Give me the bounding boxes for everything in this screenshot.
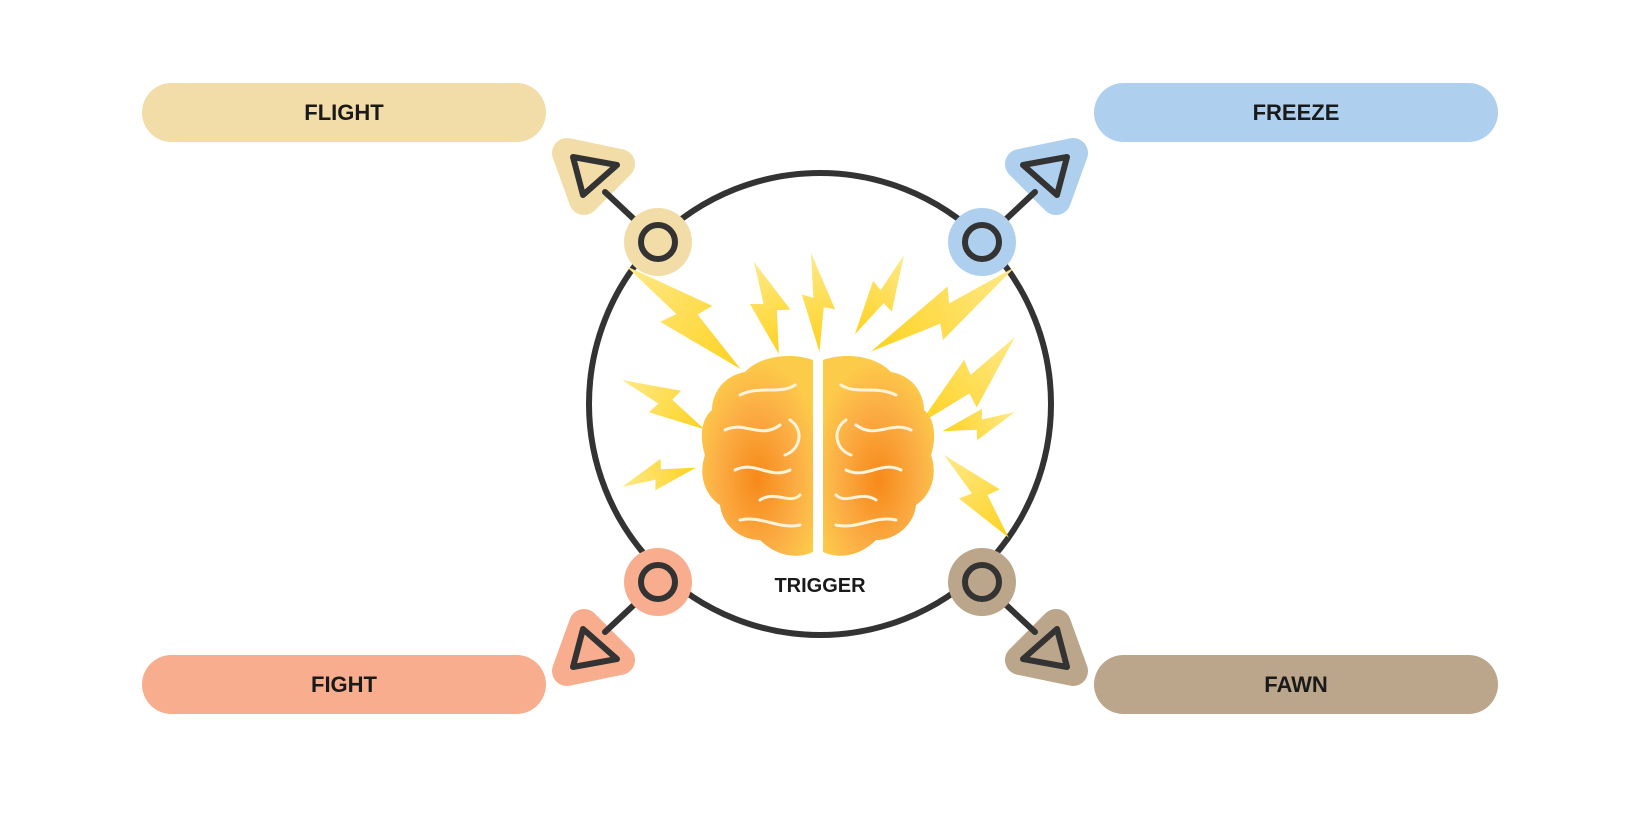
pill: flight: FLIGHT: [304, 100, 384, 124]
label: trigger: TRIGGER: [774, 575, 866, 597]
pill: freeze: FREEZE: [1253, 100, 1339, 124]
arrow: flight: [567, 153, 692, 276]
main circle: [589, 173, 1051, 635]
pill: fight: FIGHT: [311, 672, 377, 696]
pill: fawn: FAWN: [1264, 672, 1328, 696]
arrow: fight: [567, 548, 692, 671]
lightning bolts: [612, 248, 1030, 545]
pill: freeze: [1094, 83, 1498, 142]
arrow: freeze: [948, 153, 1073, 276]
pill: flight: [142, 83, 546, 142]
pill: fight: [142, 655, 546, 714]
icon: brain: [702, 356, 934, 556]
arrow: fawn: [948, 548, 1073, 671]
pill: fawn: [1094, 655, 1498, 714]
